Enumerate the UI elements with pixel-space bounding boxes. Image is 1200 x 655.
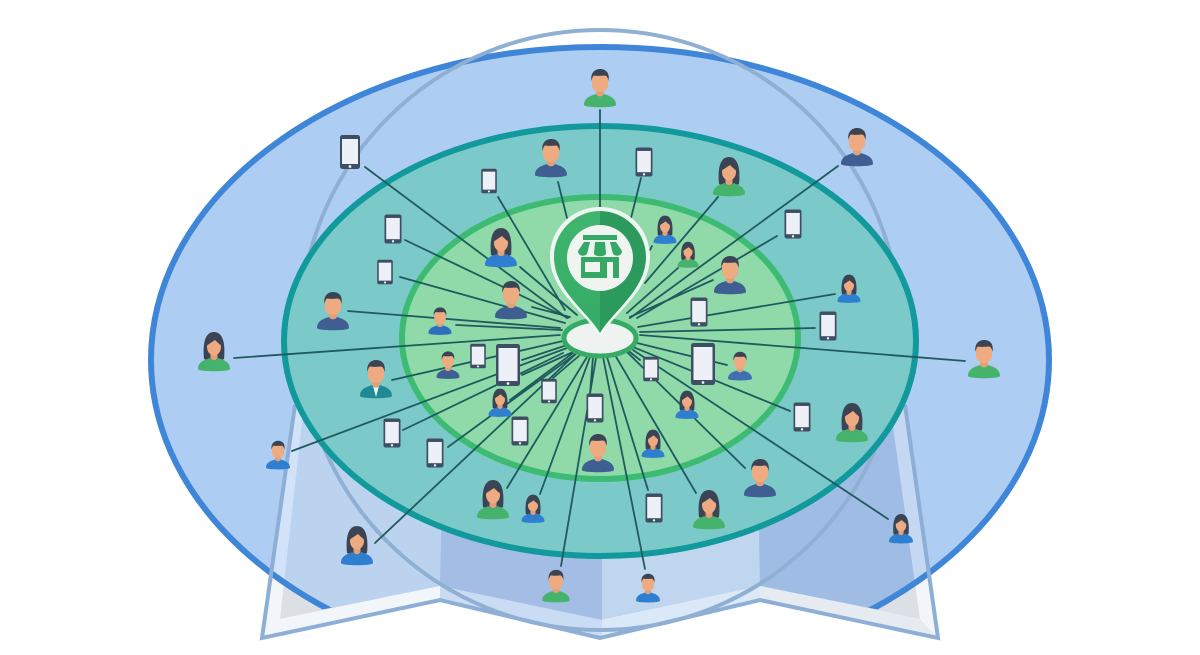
icon: person 27 (693, 490, 725, 529)
map lower border strips (264, 586, 936, 638)
icon: person 30 (542, 570, 570, 602)
icon: person 13 (198, 332, 230, 371)
icon: person 25 (477, 480, 509, 519)
icon: phone 3 (636, 148, 652, 176)
icon: person 15 (436, 351, 460, 379)
folded map base (262, 405, 938, 638)
icon: person 10 (837, 275, 861, 303)
icon: person 26 (521, 495, 545, 523)
thin circle boundary (300, 30, 900, 630)
map panels inside outer zone (274, 408, 926, 620)
icon: person 7 (677, 242, 699, 268)
map outline (262, 405, 938, 638)
outer zone outline (151, 47, 1049, 655)
icon: phone 4 (384, 215, 402, 243)
icon: person 6 (653, 216, 677, 244)
icon: phone 13 (794, 403, 810, 431)
icon: store location pin (550, 207, 650, 338)
icon: person 28 (889, 514, 913, 543)
icon: phone 15 (512, 417, 528, 445)
connection lines (234, 110, 965, 569)
icon: person 11 (317, 292, 349, 330)
icon: person 1 (584, 69, 616, 107)
icon: person 16 (728, 352, 752, 380)
icon: person 18 (488, 389, 512, 417)
icon: phone 10 (643, 357, 659, 381)
pin base ellipse (564, 320, 636, 356)
icon: phone 11 (541, 379, 557, 403)
icon: person 4 (713, 157, 745, 196)
icon: phone 6 (784, 210, 802, 238)
icon: phone 1 (340, 135, 360, 169)
icon: person 17 (360, 360, 392, 398)
icon: person 29 (341, 526, 373, 565)
icon: person 31 (636, 574, 660, 602)
green inner zone (402, 197, 798, 479)
icon: person 22 (582, 434, 614, 472)
icon: person 23 (266, 441, 290, 469)
icon: phone 5 (377, 260, 393, 284)
icon: storefront (578, 235, 622, 278)
illustration: store reach zones (148, 28, 1052, 640)
icon: person 8 (714, 256, 746, 294)
icon: phone 7 (690, 298, 708, 326)
icon: phone 12 (586, 394, 604, 422)
icon: person 21 (641, 430, 665, 458)
icon: person 12 (428, 307, 452, 335)
icon: person 9 (495, 281, 527, 319)
icon: person 3 (535, 139, 567, 177)
icon: person 14 (968, 340, 1000, 378)
icon: phone 14 (384, 419, 400, 447)
icon: phone 9 (470, 344, 486, 368)
icon: person 5 (485, 228, 517, 267)
icon: person 2 (841, 128, 873, 166)
icon: tablet 2 (691, 343, 715, 385)
icon: person 19 (675, 391, 699, 419)
icon: phone 8 (820, 312, 836, 340)
icon: person 20 (836, 403, 868, 442)
icon: person 24 (744, 459, 776, 497)
icon: tablet 1 (496, 344, 520, 386)
icon: phone 16 (426, 439, 444, 467)
icon: phone 2 (481, 169, 497, 193)
teal middle zone (284, 126, 916, 556)
outer zone fill (151, 47, 1049, 655)
icon: phone 17 (646, 494, 662, 522)
outer blue reach zone (151, 47, 1049, 655)
